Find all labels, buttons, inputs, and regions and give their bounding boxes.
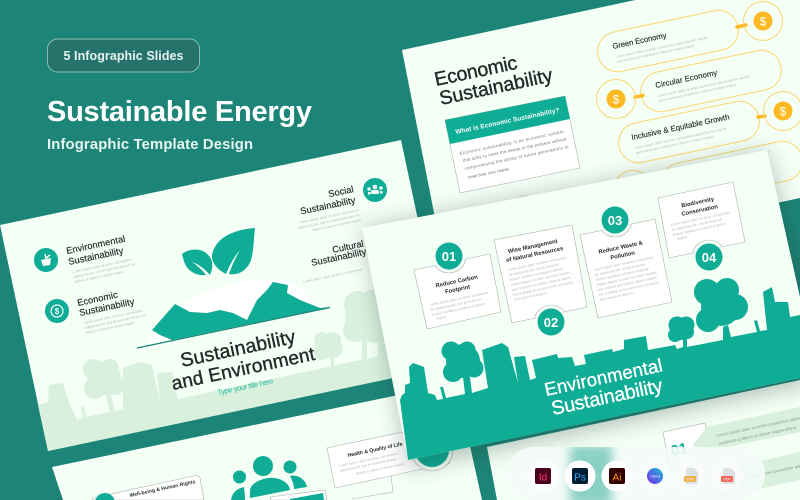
card: reduce waste and pollution: tempor incididunt ut labore et dolore bbox=[595, 267, 649, 282]
card: wise management of natural resources: 02 bbox=[544, 315, 558, 330]
panel: slide wellbeing bbox=[52, 383, 482, 500]
label: environmental sustainability: Sustainability bbox=[67, 244, 124, 267]
list item: inclusive and equitable growth: $ bbox=[780, 104, 787, 118]
list item: inclusive and equitable growth: Lorem ipsum dolor sit amet, consectetur adipiscing elit, sed do bbox=[634, 127, 727, 150]
blurred highlight bbox=[570, 445, 612, 500]
heading: Economic Sustainability: Sustainability bbox=[437, 64, 555, 110]
label: social sustainability: ididunt ut labore et dolore magna bbox=[312, 218, 361, 232]
label: social sustainability: Social bbox=[327, 183, 354, 199]
card: health and quality of life: adipiscing elit, sed do eiusmod tempor bbox=[339, 457, 397, 473]
panel: slide sustainability and environment bbox=[0, 140, 449, 451]
heading: Environmental Sustainability: Sustainability bbox=[549, 375, 665, 420]
label: environmental sustainability: ididunt ut labore et dolore magna bbox=[74, 270, 124, 284]
label: social sustainability: adipiscing elit, sed do eiusmod tempor inc bbox=[298, 213, 361, 230]
card: wise management of natural resources: Duis aute irure dolor in bbox=[513, 291, 548, 302]
label: social sustainability: Lorem ipsum dolor sit amet, consectetur bbox=[299, 208, 360, 225]
card: reduce waste and pollution: quis nostrud exercitation ullamco laboris bbox=[597, 275, 657, 292]
list item: green economy: Green Economy bbox=[612, 31, 667, 51]
card: number 01: 01 bbox=[669, 440, 689, 460]
card: wise management of natural resources: tempor incididunt ut labore et dolore bbox=[509, 267, 563, 282]
card: reduce waste and pollution: Pollution bbox=[610, 250, 636, 262]
list item: inclusive and equitable growth: eiusmod tempor incididunt ut labore et dolore magna bbox=[635, 135, 714, 155]
label: cultural sustainability: Cultural bbox=[331, 239, 364, 255]
list item: fourth pill bbox=[614, 138, 800, 210]
card: reduce waste and pollution: magna aliqua. Ut enim ad minim veniam, bbox=[596, 270, 657, 287]
panel: slide five bbox=[487, 380, 800, 500]
card: biodiversity conservation: tempor incididunt ut labore et dolore bbox=[672, 222, 726, 237]
card: reduce carbon footprint: for adipiscing elit, sed do eiusmod bbox=[430, 297, 481, 312]
icon: coin: $ bbox=[55, 307, 60, 316]
card: biodiversity conservation: Conservation bbox=[681, 204, 719, 218]
badge: 5 Infographic Slides: 5 Infographic Slides bbox=[64, 49, 184, 63]
card: wise management of natural resources: Wise Management bbox=[507, 239, 558, 255]
list item: circular economy: Circular Economy bbox=[655, 68, 718, 90]
card: reduce carbon footprint: Reduce Carbon bbox=[435, 275, 479, 289]
panel: slide economic sustainability bbox=[402, 0, 800, 274]
icon: EPS file: EPS bbox=[686, 478, 694, 482]
list item: circular economy: eiusmod tempor incididunt ut labore et dolore magna bbox=[658, 83, 737, 103]
icon: InDesign bbox=[528, 460, 558, 492]
icon: social bbox=[363, 178, 387, 202]
card: biodiversity conservation: Lorem ipsum dolor sit amet, consectetur bbox=[670, 210, 731, 227]
icon: people bbox=[231, 456, 307, 500]
icon: leaves bbox=[182, 228, 255, 275]
label: cultural sustainability: Sustainability bbox=[310, 245, 367, 268]
card: reduce carbon footprint: Lorem ipsum dolor sit amet, consectetur bbox=[429, 290, 490, 307]
list item: inclusive and equitable growth bbox=[615, 92, 800, 166]
label: environmental sustainability: Environmental bbox=[65, 234, 126, 256]
card: health and quality of life: Health & Quality of Life bbox=[347, 441, 403, 459]
card: wise management of natural resources: magna aliqua. Ut enim ad minim veniam, bbox=[510, 270, 571, 287]
card: wise management of natural resources: quis nostrud exercitation ullamco laboris bbox=[511, 275, 571, 292]
label: cultural sustainability: Lorem ipsum dolor sit amet, consectetur bbox=[302, 267, 363, 284]
icon: InDesign: Id bbox=[539, 472, 547, 484]
globe bbox=[137, 279, 330, 348]
card: number 01 bbox=[663, 423, 712, 470]
card: reduce waste and pollution: Reduce Waste & bbox=[598, 240, 644, 256]
icon: Canva: Canva bbox=[650, 474, 660, 478]
card: wise management of natural resources: Lorem ipsum dolor sit amet, consectetur bbox=[507, 255, 568, 272]
green panel one bbox=[692, 407, 800, 450]
card: what is economic sustainability: Economic sustainability is an economic system bbox=[459, 129, 564, 156]
icon: plant pot bbox=[34, 248, 58, 272]
icon: Illustrator: Ai bbox=[613, 472, 621, 484]
label: economic sustainability: Sustainability bbox=[78, 295, 135, 318]
icon: Photoshop: Ps bbox=[574, 472, 586, 484]
card: reduce waste and pollution bbox=[580, 203, 672, 318]
panel: slide environmental sustainability bbox=[362, 150, 800, 460]
card: lower centre bbox=[270, 490, 327, 500]
card: reduce waste and pollution: for adipiscing elit, sed do eiusmod bbox=[594, 262, 645, 277]
green panel one: incididunt ut labore et dolore magna aliqua bbox=[718, 425, 797, 446]
icon: EPS file bbox=[676, 460, 706, 492]
heading: Sustainability and Environment: Sustainability bbox=[178, 326, 298, 372]
card: what is economic sustainability: compromising the ability of future generations to bbox=[464, 144, 569, 171]
card: reduce waste and pollution: Lorem ipsum dolor sit amet, consectetur bbox=[593, 255, 654, 272]
list item: circular economy bbox=[596, 47, 785, 118]
label: economic sustainability: adipiscing elit, sed do eiusmod tempor inc bbox=[84, 313, 147, 330]
heading: Economic Sustainability: Economic bbox=[432, 52, 519, 91]
skyline: light green bbox=[38, 290, 398, 451]
icon: Canva bbox=[640, 460, 670, 492]
decorative tree top bbox=[516, 195, 551, 213]
icon: Photoshop bbox=[564, 460, 596, 492]
label: environmental sustainability: Lorem ipsum dolor sit amet, consectetur bbox=[72, 257, 133, 274]
skyline: teal bbox=[400, 278, 800, 460]
label: economic sustainability: Lorem ipsum dolor sit amet, consectetur bbox=[83, 308, 144, 325]
heading: Environmental Sustainability: Environmental bbox=[542, 354, 664, 400]
card: reduce carbon footprint: tempor incididunt ut labore et dolore bbox=[431, 302, 485, 317]
icon: Illustrator bbox=[602, 460, 632, 492]
card: reduce carbon footprint: Footprint bbox=[445, 284, 471, 296]
list item: green economy: Lorem ipsum dolor sit amet, consectetur adipiscing elit, sed do bbox=[615, 36, 708, 59]
label: social sustainability: Sustainability bbox=[299, 194, 356, 216]
label: cultural sustainability bbox=[302, 239, 367, 284]
label: social sustainability bbox=[298, 183, 361, 232]
card: biodiversity conservation: 04 bbox=[702, 250, 717, 265]
card: biodiversity conservation bbox=[658, 182, 745, 274]
list item: green economy: $ bbox=[760, 14, 767, 28]
card: what is economic sustainability: meet their own needs. bbox=[467, 166, 510, 180]
label: economic sustainability: ididunt ut labore et dolore magna bbox=[85, 321, 135, 335]
card: wellbeing and human rights: Well-being & Human Rights bbox=[129, 479, 196, 499]
list item: green economy: eiusmod tempor incididunt ut labore et dolore magna bbox=[616, 44, 695, 64]
card: reduce waste and pollution: nisi ut aliquip ex ea commodo consequat. bbox=[598, 280, 660, 297]
card: health and quality of life bbox=[327, 424, 453, 488]
icon: PDF file bbox=[712, 460, 744, 492]
card: wise management of natural resources: nisi ut aliquip ex ea commodo consequat. bbox=[512, 280, 574, 297]
software toolbar bbox=[507, 445, 765, 500]
icon: PDF file: PDF bbox=[724, 478, 730, 482]
label: environmental sustainability bbox=[65, 234, 136, 284]
card: reduce carbon footprint: 01 bbox=[442, 249, 456, 264]
card: wise management of natural resources: of Natural Resources bbox=[506, 246, 564, 264]
heading: Environmental Sustainability bbox=[542, 354, 665, 420]
card: biodiversity conservation: Biodiversity bbox=[681, 196, 715, 209]
card: reduce carbon footprint bbox=[414, 239, 501, 329]
card: health and quality of life: Lorem ipsum dolor sit amet, consectetur bbox=[338, 451, 399, 468]
card: what is economic sustainability bbox=[445, 96, 580, 193]
list item: fourth pill: Lorem ipsum dolor sit amet, consectetur adipiscing elit bbox=[689, 150, 770, 171]
label: economic sustainability: Economic bbox=[76, 290, 119, 308]
label: economic sustainability bbox=[76, 290, 147, 335]
subheading: Type your title here bbox=[217, 376, 274, 397]
card: lower right outline bbox=[352, 476, 393, 499]
heading: Sustainability and Environment: and Environment bbox=[170, 344, 318, 395]
list item: green economy bbox=[594, 2, 782, 75]
card: biodiversity conservation: magna bbox=[676, 235, 687, 241]
shadow under environmental slide bbox=[362, 150, 800, 470]
card: reduce waste and pollution: 03 bbox=[608, 213, 622, 228]
icon: coin bbox=[45, 299, 69, 323]
badge: 5 Infographic Slides bbox=[48, 39, 200, 72]
card: what is economic sustainability: What is Economic Sustainability? bbox=[455, 107, 560, 136]
label: environmental sustainability: adipiscing elit, sed do eiusmod tempor inc bbox=[73, 262, 136, 279]
title: Sustainable Energy bbox=[47, 96, 312, 128]
card: what is economic sustainability: that aims to meet the needs of the present without bbox=[462, 136, 568, 163]
list item: circular economy: Lorem ipsum dolor sit amet, consectetur adipiscing elit, sed do bbox=[657, 75, 750, 98]
card: reduce carbon footprint: magna bbox=[435, 315, 446, 321]
subtitle: Infographic Template Design bbox=[47, 137, 253, 153]
card: reduce waste and pollution: Duis aute irure dolor in bbox=[599, 291, 634, 302]
card: biodiversity conservation: for adipiscing elit, sed do eiusmod bbox=[671, 217, 722, 232]
card: wellbeing and human rights bbox=[92, 475, 204, 500]
card: wise management of natural resources bbox=[494, 225, 587, 339]
card: wise management of natural resources: for adipiscing elit, sed do eiusmod bbox=[508, 262, 559, 277]
list item: inclusive and equitable growth: Inclusive & Equitable Growth bbox=[631, 112, 730, 142]
list item: circular economy: $ bbox=[613, 92, 620, 106]
green panel two bbox=[710, 452, 800, 497]
card: health and quality of life: ididunt ut labore et dolore magna bbox=[355, 462, 405, 476]
